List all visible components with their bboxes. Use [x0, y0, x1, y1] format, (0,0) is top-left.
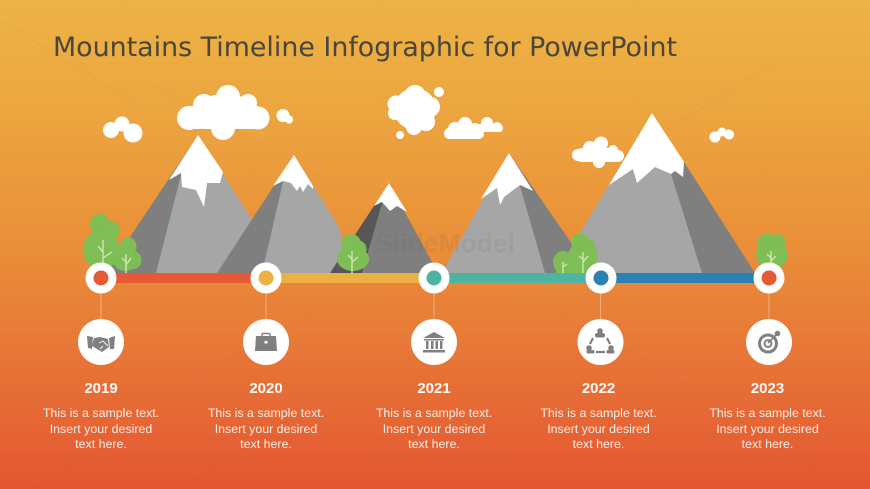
mountain 4 — [442, 153, 592, 273]
tree 3 — [337, 234, 369, 273]
cloud: small far right — [710, 128, 734, 142]
text block 2023: Insert your desired — [716, 422, 819, 436]
text block 2020: Insert your desired — [215, 422, 317, 436]
text block 2019 — [43, 380, 159, 451]
icon: handshake — [78, 319, 124, 365]
timeline node 2023 — [754, 262, 784, 294]
title: Mountains Timeline Infographic for PowerPoint — [53, 32, 677, 63]
cloud: right of peak — [572, 136, 624, 168]
timeline node 2019 — [86, 262, 116, 294]
text block 2020: 2020 — [249, 380, 283, 397]
timeline node 2021 — [418, 262, 450, 294]
text block 2022: text here. — [573, 437, 624, 451]
cloud: small left — [103, 116, 142, 142]
snow cap 1 — [169, 135, 223, 207]
text block 2021 — [376, 380, 492, 451]
text block 2023: This is a sample text. — [709, 406, 826, 420]
mountain 3 — [330, 183, 438, 273]
snow cap 2 — [273, 155, 313, 192]
text block 2019: text here. — [75, 437, 127, 451]
text block 2023 — [709, 380, 826, 451]
text block 2022: This is a sample text. — [540, 406, 657, 420]
connectors — [101, 293, 769, 320]
text block 2020 — [208, 380, 324, 451]
icon: target — [746, 319, 792, 365]
watermark: SlideModel — [375, 228, 515, 258]
text block 2022: 2022 — [582, 380, 615, 397]
timeline node 2022 — [586, 262, 616, 294]
mountain 2 — [217, 155, 342, 273]
cloud: small right of large cloud — [276, 109, 293, 124]
icon: briefcase — [243, 319, 289, 365]
text block 2019: Insert your desired — [50, 422, 152, 436]
text block 2021: text here. — [408, 437, 460, 451]
text block 2023: text here. — [742, 437, 793, 451]
text block 2020: This is a sample text. — [208, 406, 324, 420]
icon: team cycle — [578, 319, 624, 365]
text block 2022: Insert your desired — [547, 422, 650, 436]
text block 2023: 2023 — [751, 380, 784, 397]
text block 2021: Insert your desired — [383, 422, 485, 436]
text block 2021: This is a sample text. — [376, 406, 492, 420]
snow cap 3 — [374, 183, 407, 212]
text block 2022 — [540, 380, 657, 451]
text block 2019: This is a sample text. — [43, 406, 159, 420]
snow cap 4 — [481, 153, 533, 205]
text block 2021: 2021 — [417, 380, 451, 397]
icon: bank — [411, 319, 457, 365]
timeline bars — [101, 273, 769, 283]
tree 1 — [83, 214, 120, 272]
cloud: thought bubble — [388, 85, 444, 139]
mountain 1 — [106, 135, 262, 273]
tree 5 — [756, 234, 788, 269]
cloud: flat middle — [444, 117, 503, 139]
text block 2020: text here. — [240, 437, 292, 451]
timeline node 2020 — [250, 262, 282, 294]
cloud: large left — [177, 85, 270, 140]
mountain 5 — [556, 113, 755, 273]
snow cap 5 — [609, 113, 684, 185]
text block 2019: 2019 — [84, 380, 118, 397]
tree 2 — [113, 238, 142, 273]
tree 4 — [553, 233, 598, 273]
